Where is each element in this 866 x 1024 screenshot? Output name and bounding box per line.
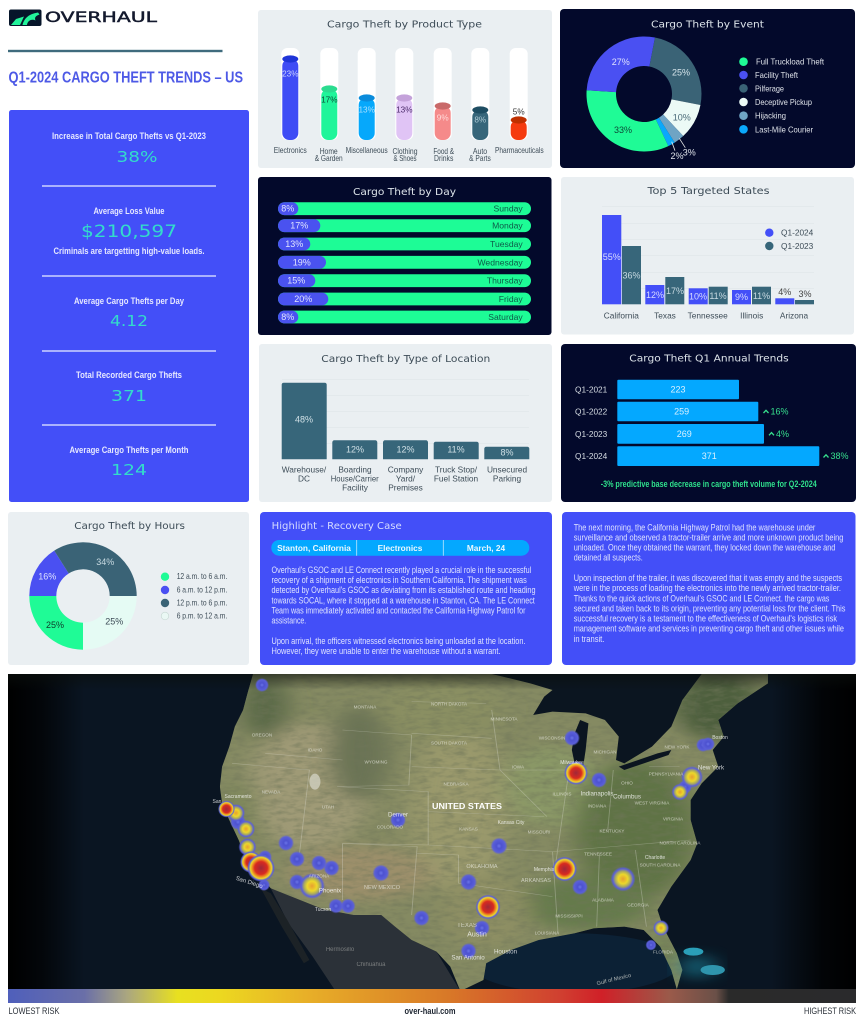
- stat: total recorded thefts: Total Recorded Cargo Thefts: [76, 370, 182, 380]
- map labels: ARKANSAS: [521, 878, 551, 884]
- legend: event: [739, 56, 825, 134]
- map labels: NORTH DAKOTA: [431, 702, 468, 706]
- map labels: ALABAMA: [592, 898, 615, 902]
- panel: cargo theft by product type: [258, 10, 552, 168]
- cylinder: electronics: [274, 48, 307, 155]
- grouped bar chart: states: Illinois: [740, 310, 763, 320]
- donut chart: event: 25%: [672, 68, 690, 78]
- cylinder: pharmaceuticals: 5%: [513, 108, 525, 116]
- donut chart: hours: 34%: [96, 557, 114, 567]
- bar chart: location: 12%: [396, 445, 415, 455]
- map labels: San Diego: [235, 876, 264, 890]
- bar: Q1-2024: [575, 446, 849, 466]
- cylinder: electronics: Electronics: [274, 146, 307, 155]
- grouped bar chart: states: 17%: [666, 286, 684, 296]
- map labels: Kansas City: [498, 820, 525, 826]
- map labels: VIRGINIA: [663, 816, 684, 822]
- map labels: NEBRASKA: [443, 782, 469, 786]
- bar: Q1-2021: Q1-2021: [575, 384, 608, 394]
- legend: event: Hijacking: [755, 111, 786, 121]
- cylinder: miscellaneous: [346, 48, 388, 155]
- stat: thefts per day: 4.12: [110, 312, 148, 330]
- panel: cargo theft by type of location: [259, 344, 552, 502]
- stat: thefts per month: [70, 445, 189, 479]
- stat: total recorded thefts: 371: [111, 387, 147, 405]
- stat: increase in thefts: [52, 131, 206, 166]
- legend: event: Full Truckload Theft: [756, 56, 825, 66]
- map labels: [213, 702, 728, 987]
- map labels: ARIZONA: [309, 874, 330, 878]
- axis labels: location: Boarding: [338, 465, 372, 475]
- grouped bar chart: states: 11%: [709, 291, 727, 301]
- info pill: March, 24: [467, 543, 506, 553]
- info pill: Stanton, California: [277, 543, 351, 553]
- bar: Q1-2021: 223: [670, 384, 686, 394]
- map labels: MISSISSIPPI: [555, 914, 583, 918]
- grouped bar chart: states: 4%: [778, 287, 791, 297]
- legend: hours: 6 a.m. to 12 p.m.: [177, 586, 227, 594]
- cylinder: clothing and shoes: 13%: [396, 106, 412, 114]
- bar: tuesday: 13%: [285, 239, 303, 249]
- map labels: Columbus: [613, 794, 641, 800]
- axis labels: location: Premises: [388, 483, 423, 493]
- body text: assistance.: [272, 616, 306, 626]
- axis labels: location: Truck Stop/: [435, 465, 478, 475]
- legend: states: [765, 228, 814, 251]
- bar: Q1-2024: 38%: [830, 451, 849, 461]
- grouped bar chart: states: Tennessee: [688, 310, 728, 320]
- bar chart: location: 48%: [295, 414, 313, 424]
- grouped bar chart: states: Texas: [654, 310, 676, 320]
- map labels: Chihuahua: [356, 962, 386, 968]
- legend: event: Facility Theft: [755, 70, 799, 80]
- body text: Team was immediately activated and contacted the California Highway Patrol for: [272, 605, 526, 615]
- bar: Q1-2021: [575, 380, 739, 399]
- legend: states: Q1-2023: [781, 241, 814, 251]
- stat: total recorded thefts: [76, 370, 182, 405]
- bar chart: location: 8%: [500, 448, 514, 458]
- donut chart: event: 10%: [673, 112, 691, 122]
- map: US cargo theft heat map: [8, 670, 856, 993]
- bar: thursday: [278, 274, 531, 287]
- map labels: WYOMING: [365, 760, 388, 764]
- map labels: San Antonio: [451, 954, 485, 962]
- cylinder: home and garden: 17%: [321, 96, 337, 104]
- map labels: UTAH: [322, 804, 334, 810]
- cylinder: clothing and shoes: & Shoes: [394, 154, 416, 163]
- map labels: Gulf of Mexico: [596, 973, 632, 987]
- stat: thefts per day: Average Cargo Thefts per Day: [74, 296, 185, 306]
- map labels: GEORGIA: [627, 902, 650, 908]
- grouped bar chart: states: Arizona: [780, 310, 808, 320]
- grouped bar chart: states: 11%: [753, 291, 770, 301]
- map labels: MICHIGAN: [594, 750, 616, 754]
- cylinder: miscellaneous: 13%: [359, 106, 375, 114]
- donut chart: event: 27%: [612, 57, 630, 67]
- cylinder: auto and parts: 8%: [474, 116, 486, 124]
- bar: friday: [278, 293, 531, 305]
- label: highest risk: HIGHEST RISK: [804, 1006, 856, 1016]
- map labels: Phoenix: [319, 888, 342, 894]
- axis labels: location: Fuel Station: [434, 474, 479, 484]
- bar chart: location: [282, 383, 529, 459]
- legend: hours: [161, 572, 227, 620]
- legend: event: Pilferage: [755, 83, 784, 93]
- bar: tuesday: Tuesday: [490, 239, 523, 249]
- bar: Q1-2022: 259: [674, 406, 689, 416]
- donut chart: hours: [29, 542, 137, 650]
- panel: highlight recovery case: [260, 512, 552, 665]
- panel: cargo theft Q1 annual trends: [561, 344, 856, 502]
- title: Q1-2024 CARGO THEFT TRENDS – US: [8, 70, 243, 86]
- map labels: Boston: [712, 735, 728, 741]
- map labels: INDIANA: [588, 804, 607, 808]
- donut chart: hours: 25%: [105, 616, 123, 626]
- map labels: IOWA: [512, 764, 525, 770]
- bar: Q1-2023: [575, 424, 789, 444]
- cylinder: clothing and shoes: [392, 48, 418, 163]
- cylinder: auto and parts: [469, 48, 491, 163]
- grouped bar chart: states: [602, 215, 814, 320]
- donut chart: event: [587, 37, 701, 161]
- legend: hours: 6 p.m. to 12 a.m.: [177, 612, 227, 620]
- map labels: OHIO: [621, 780, 633, 786]
- bar: sunday: Sunday: [494, 204, 523, 214]
- axis labels: location: Parking: [493, 474, 521, 484]
- axis labels: location: Facility: [342, 483, 369, 493]
- label: lowest risk: LOWEST RISK: [8, 1006, 60, 1016]
- panel: cargo theft by day: [258, 177, 552, 335]
- bar: wednesday: [278, 256, 531, 269]
- cylinder: food and drinks: 9%: [437, 114, 449, 122]
- panel: recovery case continued: [562, 512, 856, 665]
- bar: saturday: Saturday: [488, 312, 523, 322]
- stat: average loss value: Average Loss Value: [94, 206, 164, 216]
- bar chart: location: 11%: [447, 445, 465, 455]
- map labels: UNITED STATES: [432, 801, 502, 811]
- map labels: San: [213, 799, 222, 805]
- legend bar: risk gradient: [8, 989, 856, 1003]
- donut chart: hours: 16%: [38, 572, 56, 582]
- stat: thefts per day: [74, 296, 185, 330]
- body text: detected by Overhaul's GSOC as deviating from its established route and heading: [272, 585, 536, 595]
- axis labels: location: [282, 465, 527, 493]
- stat: average loss value: Criminals are targetting high-value loads.: [54, 246, 204, 256]
- heading: Cargo Theft by Hours: [74, 521, 185, 532]
- stat: thefts per month: Average Cargo Thefts per Month: [70, 445, 189, 455]
- body text: [272, 565, 536, 656]
- cylinder: home and garden: Home: [320, 147, 338, 156]
- bar: tuesday: [278, 238, 531, 250]
- bar: friday: 20%: [294, 294, 312, 304]
- map labels: NEW YORK: [665, 744, 690, 750]
- bar: Q1-2022: Q1-2022: [575, 406, 608, 416]
- map labels: COLORADO: [377, 824, 404, 830]
- map labels: KENTUCKY: [599, 828, 625, 834]
- cylinder: auto and parts: & Parts: [469, 154, 491, 163]
- cylinder: food and drinks: Drinks: [434, 154, 453, 163]
- map labels: TEXAS: [457, 923, 477, 929]
- grouped bar chart: states: 9%: [735, 292, 748, 302]
- grouped bar chart: states: 3%: [798, 289, 812, 299]
- axis labels: location: House/Carrier: [331, 474, 379, 484]
- map labels: Milwaukee: [560, 760, 584, 766]
- bar: wednesday: 19%: [293, 257, 311, 267]
- heading: Highlight - Recovery Case: [272, 521, 402, 532]
- map labels: PENNSYLVANIA: [649, 772, 684, 776]
- cylinder: pharmaceuticals: Pharmaceuticals: [495, 146, 544, 155]
- bar: saturday: [278, 311, 531, 323]
- map labels: Denver: [388, 812, 408, 818]
- info pill: Electronics: [378, 543, 423, 553]
- map labels: NEW MEXICO: [364, 885, 401, 891]
- map labels: MONTANA: [354, 704, 377, 710]
- logo: Overhaul: OVERHAUL: [45, 10, 157, 26]
- map labels: LOUISIANA: [535, 930, 560, 936]
- body text: Overhaul's GSOC and LE Connect recently played a crucial role in the successful: [272, 565, 531, 575]
- map labels: Hermosillo: [326, 947, 355, 953]
- callout: prediction: -3% predictive base decrease in cargo theft volume for Q2-2024: [601, 479, 817, 489]
- bar chart: location: 12%: [346, 445, 364, 455]
- body text: recovery of a shipment of electronics in Southern California. The shipment was: [272, 575, 527, 585]
- legend: states: Q1-2024: [781, 228, 814, 238]
- donut chart: event: 33%: [614, 125, 632, 135]
- bar: sunday: 8%: [281, 204, 294, 214]
- cylinder: food and drinks: Food &: [433, 147, 454, 156]
- cylinder: auto and parts: Auto: [473, 147, 488, 156]
- bar: Q1-2023: 4%: [776, 429, 789, 439]
- bar: saturday: 8%: [281, 312, 294, 322]
- heading: Top 5 Targeted States: [646, 186, 770, 197]
- bar: monday: 17%: [290, 221, 308, 231]
- panel: recovery case continued: detained all suspects.: [574, 553, 643, 563]
- stat: increase in thefts: 38%: [116, 148, 158, 166]
- bar: Q1-2024: Q1-2024: [575, 451, 608, 461]
- bar: sunday: [278, 202, 531, 215]
- map labels: TENNESSEE: [584, 852, 612, 856]
- grouped bar chart: states: 12%: [646, 290, 664, 300]
- bar: thursday: 15%: [287, 276, 305, 286]
- bar: Q1-2024: 371: [702, 451, 717, 461]
- panel: recovery case continued: in transit.: [574, 634, 604, 644]
- panel: cargo theft by event: [560, 9, 855, 168]
- heading: Cargo Theft Q1 Annual Trends: [629, 354, 789, 364]
- map labels: NORTH CAROLINA: [659, 840, 701, 846]
- legend: hours: 12 p.m. to 6 p.m.: [177, 598, 227, 608]
- bar: friday: Friday: [499, 294, 523, 304]
- axis labels: location: Unsecured: [487, 465, 527, 475]
- panel: key statistics: [9, 110, 249, 502]
- map labels: MINNESOTA: [491, 716, 518, 722]
- stat: thefts per month: 124: [111, 461, 147, 479]
- donut chart: event: 2%: [670, 151, 684, 161]
- grouped bar chart: states: 10%: [689, 292, 707, 302]
- info pill: [271, 540, 529, 556]
- bar: Q1-2023: 269: [677, 429, 692, 439]
- map labels: New York: [698, 764, 725, 772]
- panel: recovery case continued: The next morning, the California Highway Patrol had the warehouse under: [574, 522, 815, 532]
- heading: Cargo Theft by Product Type: [327, 20, 482, 30]
- map labels: KANSAS: [459, 826, 478, 832]
- cylinder: food and drinks: [433, 48, 454, 163]
- panel: cargo theft by hours: [8, 512, 249, 665]
- body text: towards SOCAL, where it stopped at a warehouse in Stanton, CA. The LE Connect: [272, 595, 535, 605]
- map labels: SOUTH CAROLINA: [640, 862, 681, 868]
- panel: top 5 targeted states: [561, 177, 854, 334]
- bar: monday: Monday: [492, 221, 523, 231]
- donut chart: event: 3%: [683, 147, 696, 157]
- legend: event: Deceptive Pickup: [755, 97, 812, 107]
- cylinder: electronics: 23%: [282, 70, 298, 78]
- legend: event: Last-Mile Courier: [755, 124, 813, 134]
- stat: increase in thefts: Increase in Total Cargo Thefts vs Q1-2023: [52, 131, 206, 141]
- bar: wednesday: Wednesday: [477, 257, 523, 267]
- map labels: Indianapolis: [580, 790, 614, 798]
- body text: However, they were unable to enter the warehouse without a warrant.: [272, 646, 500, 656]
- grouped bar chart: states: California: [604, 310, 639, 320]
- stat: average loss value: $210,597: [81, 222, 177, 242]
- bar: Q1-2023: Q1-2023: [575, 429, 608, 439]
- map labels: MISSOURI: [528, 830, 550, 834]
- map labels: OREGON: [252, 732, 272, 738]
- bar: thursday: Thursday: [487, 276, 523, 286]
- map labels: Tucson: [315, 907, 331, 913]
- bar: Q1-2022: 16%: [770, 406, 789, 416]
- donut chart: hours: 25%: [46, 620, 64, 630]
- map labels: Sacramento: [225, 794, 252, 800]
- logo: Overhaul: [9, 10, 157, 26]
- map labels: OKLAHOMA: [466, 864, 498, 870]
- heading: Cargo Theft by Day: [353, 187, 456, 198]
- heading: Cargo Theft by Type of Location: [321, 354, 490, 365]
- cylinder: home and garden: [315, 48, 343, 163]
- cylinder: pharmaceuticals: [495, 48, 544, 155]
- bar: Q1-2022: [575, 402, 789, 421]
- cylinder: clothing and shoes: Clothing: [392, 147, 418, 156]
- heading: Cargo Theft by Event: [651, 20, 764, 30]
- axis labels: location: Company: [388, 465, 424, 475]
- map labels: ILLINOIS: [553, 792, 571, 796]
- map labels: Charlotte: [645, 855, 665, 861]
- map labels: IDAHO: [308, 748, 323, 752]
- cylinder: home and garden: & Garden: [315, 154, 343, 163]
- cylinder: miscellaneous: Miscellaneous: [346, 146, 388, 155]
- bar: monday: [278, 219, 531, 232]
- map labels: FLORIDA: [653, 950, 674, 954]
- map labels: SOUTH DAKOTA: [431, 740, 468, 746]
- stat: average loss value: [54, 206, 204, 256]
- axis labels: location: Yard/: [396, 474, 416, 484]
- map labels: NEVADA: [262, 790, 281, 794]
- axis labels: location: DC: [298, 474, 310, 484]
- axis labels: location: Warehouse/: [282, 465, 327, 475]
- legend: hours: 12 a.m. to 6 a.m.: [177, 572, 227, 581]
- heat spots: [218, 678, 715, 959]
- map labels: Austin: [467, 932, 487, 938]
- grouped bar chart: states: 36%: [622, 270, 641, 280]
- map labels: WISCONSIN: [539, 736, 565, 740]
- grouped bar chart: states: 55%: [603, 252, 621, 262]
- body text: Upon arrival, the officers witnessed electronics being unloaded at the location.: [272, 636, 526, 646]
- map labels: WEST VIRGINIA: [635, 800, 670, 806]
- map labels: Memphis: [534, 867, 555, 873]
- map labels: Houston: [494, 948, 518, 956]
- label: website: over-haul.com: [404, 1006, 456, 1016]
